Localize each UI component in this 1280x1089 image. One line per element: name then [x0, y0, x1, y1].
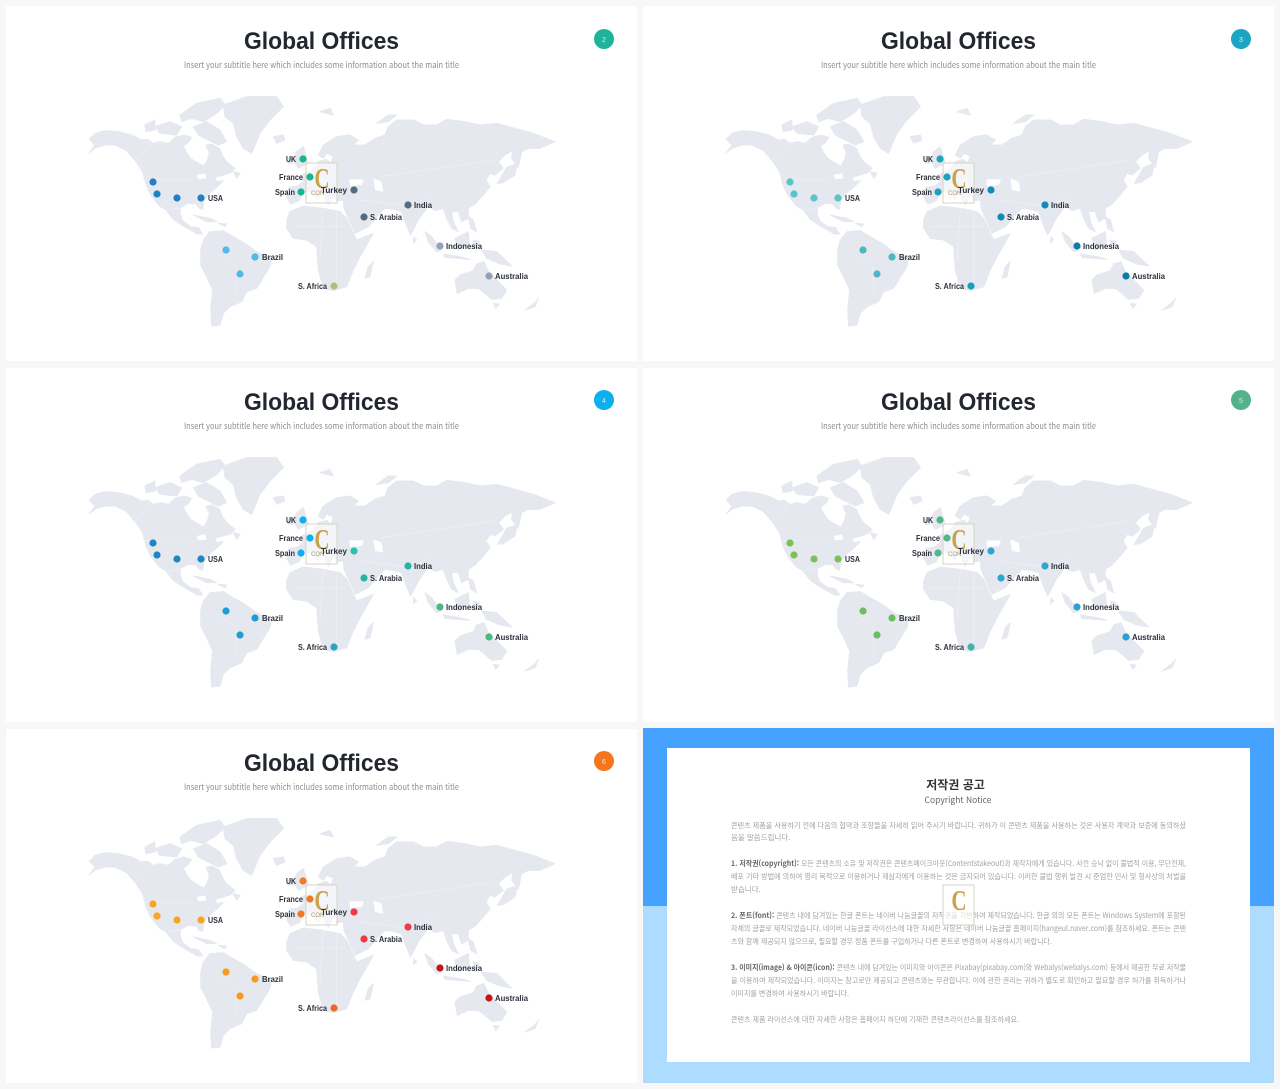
intro paragraph: 음을 말씀드립니다.	[731, 832, 790, 843]
Brazil offices: Brazil	[262, 613, 283, 623]
Brazil offices: Brazil	[262, 974, 283, 984]
Saudi Arabia office: S. Arabia	[370, 573, 402, 583]
Australia office: Australia	[1132, 271, 1165, 281]
USA offices: USA	[208, 554, 223, 564]
UK office: UK	[286, 154, 297, 164]
section 3: images and icons: 이미지를 변경하여 사용하시기 바랍니다.	[731, 988, 849, 999]
panel: copyright notice	[643, 728, 1274, 1083]
page badge: 3	[1239, 37, 1243, 44]
South Africa office: S. Africa	[298, 642, 327, 652]
Indonesia office: Indonesia	[446, 602, 482, 612]
Saudi Arabia office: S. Arabia	[1007, 573, 1039, 583]
section 2: font: 자체의 글꼴로 제작되었습니다. 네이버 나눔글꼴 라이선스에 대한 자세한 사항은 네이버 나눔글꼴 홈페이지(hangeul.naver.com)를 참조하세요. 폰트는 콘텐	[731, 923, 1186, 934]
South Africa office: S. Africa	[935, 642, 964, 652]
panel: slide 5	[643, 368, 1274, 722]
watermark	[306, 163, 337, 203]
page badge	[594, 29, 614, 49]
France office: France	[279, 533, 303, 543]
watermark	[943, 885, 974, 925]
watermark: C	[951, 886, 967, 917]
watermark: CON	[311, 191, 324, 197]
India office: India	[1051, 561, 1069, 571]
Turkey office: Turkey	[958, 546, 984, 556]
Indonesia office: Indonesia	[446, 963, 482, 973]
Indonesia office: Indonesia	[1083, 241, 1119, 251]
panel: slide 3	[643, 6, 1274, 361]
India office: India	[414, 200, 432, 210]
USA offices: USA	[845, 193, 860, 203]
Saudi Arabia office: S. Arabia	[1007, 212, 1039, 222]
page badge	[1231, 390, 1251, 410]
watermark: C	[314, 886, 330, 917]
notice heading: 저작권 공고	[926, 776, 985, 793]
Saudi Arabia office	[360, 573, 402, 583]
USA offices	[149, 900, 223, 925]
page badge	[594, 390, 614, 410]
watermark: CON	[311, 552, 324, 558]
page badge	[594, 751, 614, 771]
Saudi Arabia office	[997, 212, 1039, 222]
India office: India	[1051, 200, 1069, 210]
section 3: images and icons	[731, 962, 1186, 999]
watermark: C	[314, 525, 330, 556]
UK office	[286, 154, 307, 164]
UK office	[923, 154, 944, 164]
India office	[404, 561, 432, 571]
watermark	[943, 524, 974, 564]
world map	[726, 458, 1192, 687]
closing line: 콘텐츠 제품 라이선스에 대한 자세한 사항은 홈페이지 하단에 기재한 콘텐츠라이선스를 참조하세요.	[731, 1014, 1019, 1025]
France office: France	[279, 172, 303, 182]
UK office	[286, 876, 307, 886]
watermark: CON	[311, 913, 324, 919]
Brazil offices	[222, 246, 283, 278]
heading: Global Offices	[244, 389, 399, 416]
section 1: copyright: 받습니다.	[731, 884, 761, 895]
watermark: CON	[948, 552, 961, 558]
watermark	[943, 163, 974, 203]
world map	[89, 458, 555, 687]
page badge: 2	[602, 37, 606, 44]
Spain office: Spain	[912, 187, 932, 197]
France office: France	[279, 894, 303, 904]
page badge: 6	[602, 759, 606, 766]
panel: slide 6	[6, 729, 637, 1083]
Saudi Arabia office	[360, 934, 402, 944]
France office: France	[916, 172, 940, 182]
UK office: UK	[286, 515, 297, 525]
Brazil offices: Brazil	[899, 252, 920, 262]
Spain office: Spain	[275, 548, 295, 558]
section 3: images and icons: 3. 이미지(image) & 아이콘(icon): 콘텐츠 내에 담겨있는 이미지와 아이콘은 Pixabay(pixabay.com)와 Webalys(webalys.com) 등에서 제공한 무료 저작물	[731, 962, 1186, 973]
Australia office: Australia	[495, 993, 528, 1003]
watermark: C	[951, 525, 967, 556]
USA offices	[786, 178, 860, 203]
page badge: 4	[602, 398, 606, 405]
USA offices	[149, 178, 223, 203]
section 2: font: 2. 폰트(font): 콘텐츠 내에 담겨있는 한글 폰트는 네이버 나눔글꼴의 저작권을 기반하여 제작되었습니다. 한글 외의 모든 폰트는 Windows System에 포함된	[731, 910, 1186, 921]
Brazil offices	[222, 607, 283, 639]
India office	[404, 922, 432, 932]
world map	[89, 819, 555, 1048]
section 2: font	[731, 910, 1186, 947]
Turkey office: Turkey	[321, 185, 347, 195]
Saudi Arabia office	[997, 573, 1039, 583]
heading: Global Offices	[244, 28, 399, 55]
France office: France	[916, 533, 940, 543]
Australia office: Australia	[495, 632, 528, 642]
USA offices	[149, 539, 223, 564]
Saudi Arabia office: S. Arabia	[370, 212, 402, 222]
Saudi Arabia office	[360, 212, 402, 222]
subtitle: Insert your subtitle here which includes some information about the main title	[821, 420, 1096, 432]
UK office	[923, 515, 944, 525]
subtitle: Insert your subtitle here which includes some information about the main title	[184, 420, 459, 432]
Indonesia office: Indonesia	[446, 241, 482, 251]
India office: India	[414, 561, 432, 571]
UK office: UK	[286, 876, 297, 886]
Brazil offices: Brazil	[262, 252, 283, 262]
section 1: copyright: 1. 저작권(copyright): 모든 콘텐츠의 소유 및 저작권은 콘텐츠메이크아웃(Contentstakeout)과 제작자에게 있습니다. 사전 승낙 없이 불법적 이용, 무단전재,	[731, 858, 1186, 869]
page badge	[1231, 29, 1251, 49]
heading: Global Offices	[244, 750, 399, 777]
section 1: copyright: 배포 기타 방법에 의하여 영리 목적으로 이용하거나 제삼자에게 이용하는 것은 금지되어 있습니다. 이러한 불법 행위 발견 시 준엄한 민사 및 형사상의 처벌을	[731, 871, 1186, 882]
intro paragraph: 콘텐츠 제품을 사용하기 전에 다음의 협약과 조항들을 자세히 읽어 주시기 바랍니다. 귀하가 이 콘텐츠 제품을 사용하는 것은 사용자 계약과 보증에 동의하셨	[731, 820, 1186, 831]
subtitle: Insert your subtitle here which includes some information about the main title	[821, 59, 1096, 71]
section 2: font: 츠와 함께 제공되지 않으므로, 필요할 경우 정품 폰트를 구입하거나 다른 폰트로 변경하여 사용하시기 바랍니다.	[731, 936, 1052, 947]
world map	[726, 97, 1192, 326]
subtitle: Insert your subtitle here which includes some information about the main title	[184, 59, 459, 71]
world map	[89, 97, 555, 326]
UK office: UK	[923, 515, 934, 525]
watermark	[306, 524, 337, 564]
South Africa office: S. Africa	[935, 281, 964, 291]
UK office	[286, 515, 307, 525]
intro paragraph	[731, 820, 1186, 843]
Turkey office: Turkey	[958, 185, 984, 195]
watermark: C	[951, 164, 967, 195]
section 3: images and icons: 을 이용하여 제작되었습니다. 이미지는 참고로만 제공되고 콘텐츠와는 무관합니다. 이에 관한 권리는 귀하가 별도로 확인하고 필요할 경우 허가를 취득하거나	[731, 975, 1186, 986]
Spain office: Spain	[275, 909, 295, 919]
Brazil offices	[859, 607, 920, 639]
Spain office: Spain	[275, 187, 295, 197]
South Africa office: S. Africa	[298, 281, 327, 291]
Brazil offices	[222, 968, 283, 1000]
UK office: UK	[923, 154, 934, 164]
panel: slide 2	[6, 6, 637, 361]
USA offices: USA	[208, 193, 223, 203]
watermark	[306, 885, 337, 925]
subtitle: Insert your subtitle here which includes some information about the main title	[184, 781, 459, 793]
panel: slide 4	[6, 368, 637, 722]
section 1: copyright	[731, 858, 1186, 895]
Australia office: Australia	[1132, 632, 1165, 642]
watermark: C	[314, 164, 330, 195]
South Africa office: S. Africa	[298, 1003, 327, 1013]
USA offices: USA	[208, 915, 223, 925]
Brazil offices	[859, 246, 920, 278]
India office: India	[414, 922, 432, 932]
Brazil offices: Brazil	[899, 613, 920, 623]
Australia office: Australia	[495, 271, 528, 281]
heading: Global Offices	[881, 389, 1036, 416]
watermark: CON	[948, 191, 961, 197]
Turkey office: Turkey	[321, 546, 347, 556]
India office	[404, 200, 432, 210]
India office	[1041, 561, 1069, 571]
USA offices	[786, 539, 860, 564]
Saudi Arabia office: S. Arabia	[370, 934, 402, 944]
heading: Global Offices	[881, 28, 1036, 55]
page badge: 5	[1239, 398, 1243, 405]
Turkey office: Turkey	[321, 907, 347, 917]
India office	[1041, 200, 1069, 210]
USA offices: USA	[845, 554, 860, 564]
notice subheading: Copyright Notice	[925, 794, 992, 806]
Indonesia office: Indonesia	[1083, 602, 1119, 612]
Spain office: Spain	[912, 548, 932, 558]
